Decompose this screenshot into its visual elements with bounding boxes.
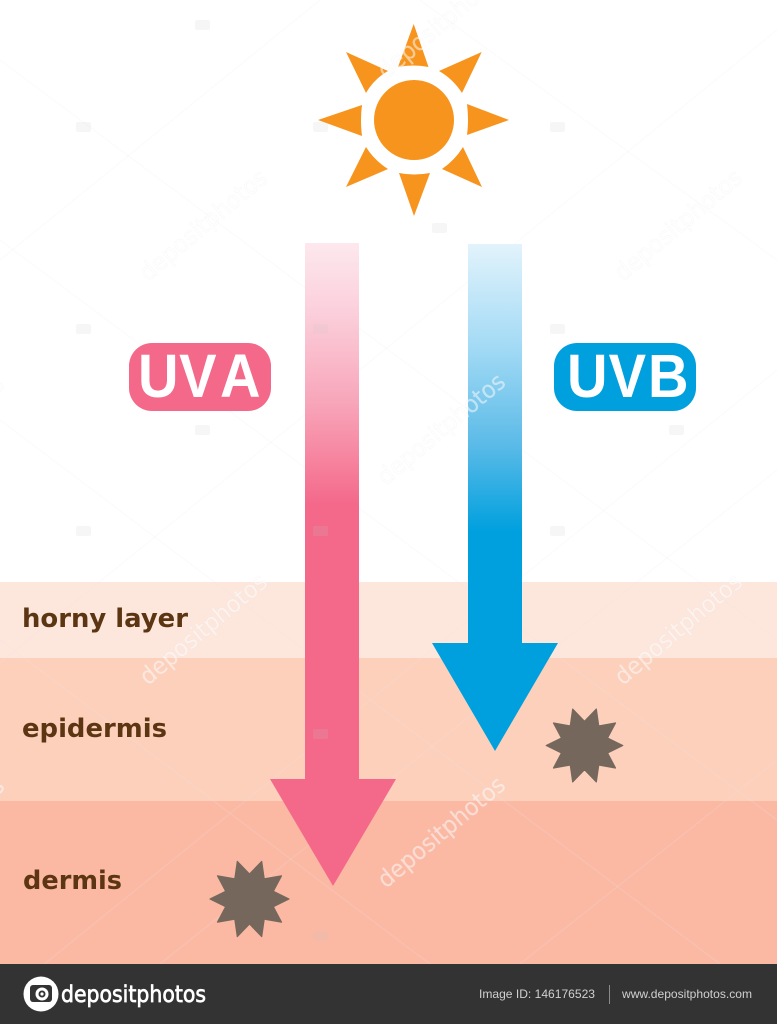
label: epidermis: epidermis — [22, 714, 167, 744]
icon: sun — [318, 24, 509, 216]
label: dermis: dermis — [23, 866, 122, 896]
layer: dermis band — [0, 801, 777, 964]
watermarks: depositphotos — [609, 164, 748, 287]
watermarks: depositphotos — [134, 164, 273, 287]
label: horny layer: horny layer — [22, 604, 188, 634]
footer bar — [0, 964, 777, 1024]
watermarks: depositphotos — [609, 568, 748, 691]
skin layers — [0, 582, 777, 964]
icon: camera logo — [24, 976, 58, 1012]
icon: damage spot in epidermis — [546, 709, 623, 782]
watermarks: depositphotos — [372, 368, 511, 491]
arrow: UVA pink arrow — [270, 243, 396, 886]
sun disc — [374, 80, 454, 160]
image id: Image ID: 146176523 — [479, 987, 595, 1001]
watermarks: depositphotos — [134, 568, 273, 691]
footer divider — [609, 985, 610, 1004]
website url: www.depositphotos.com — [621, 987, 752, 1001]
layer: epidermis band — [0, 658, 777, 801]
badge: UVA: UVA — [138, 343, 261, 411]
arrow: UVB blue arrow — [432, 244, 558, 751]
layer: horny layer band — [0, 582, 777, 658]
badge: UVB: UVB — [567, 343, 688, 411]
watermarks: depositphotos — [372, 771, 511, 894]
icon: damage spot in dermis — [210, 861, 289, 937]
sun rays — [318, 24, 509, 216]
logo wordmark: depositphotos — [61, 982, 206, 1008]
